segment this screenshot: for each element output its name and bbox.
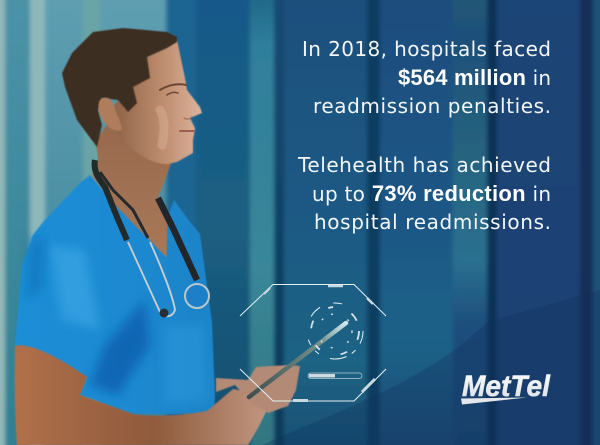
HUD frame (240, 284, 386, 401)
first statement: $564 million in (398, 65, 551, 90)
stethoscope (95, 160, 209, 318)
facial features (160, 84, 194, 145)
left arm and hand (15, 345, 267, 445)
second statement: hospital readmissions. (314, 210, 551, 234)
HUD circular dial (307, 303, 363, 359)
HUD progress bar (308, 373, 362, 378)
headline text block (297, 37, 551, 234)
first statement: readmission penalties. (313, 94, 551, 118)
second statement (297, 153, 551, 234)
scrub top (15, 175, 215, 414)
face (114, 40, 202, 164)
ear (98, 98, 122, 131)
first statement: In 2018, hospitals faced (302, 37, 551, 61)
first statement (302, 37, 551, 118)
scrub fold shadows (90, 300, 150, 395)
second statement: up to 73% reduction in (312, 181, 551, 206)
HUD graphic overlay (240, 284, 386, 401)
MetTel logo: MetTel (462, 370, 551, 403)
neck (92, 120, 172, 258)
second statement: Telehealth has achieved (297, 153, 551, 177)
tablet (249, 323, 346, 397)
right hand (216, 365, 300, 413)
man: nurse in blue scrubs (15, 28, 346, 445)
dark arc overlay (262, 290, 600, 445)
hair (62, 28, 177, 147)
